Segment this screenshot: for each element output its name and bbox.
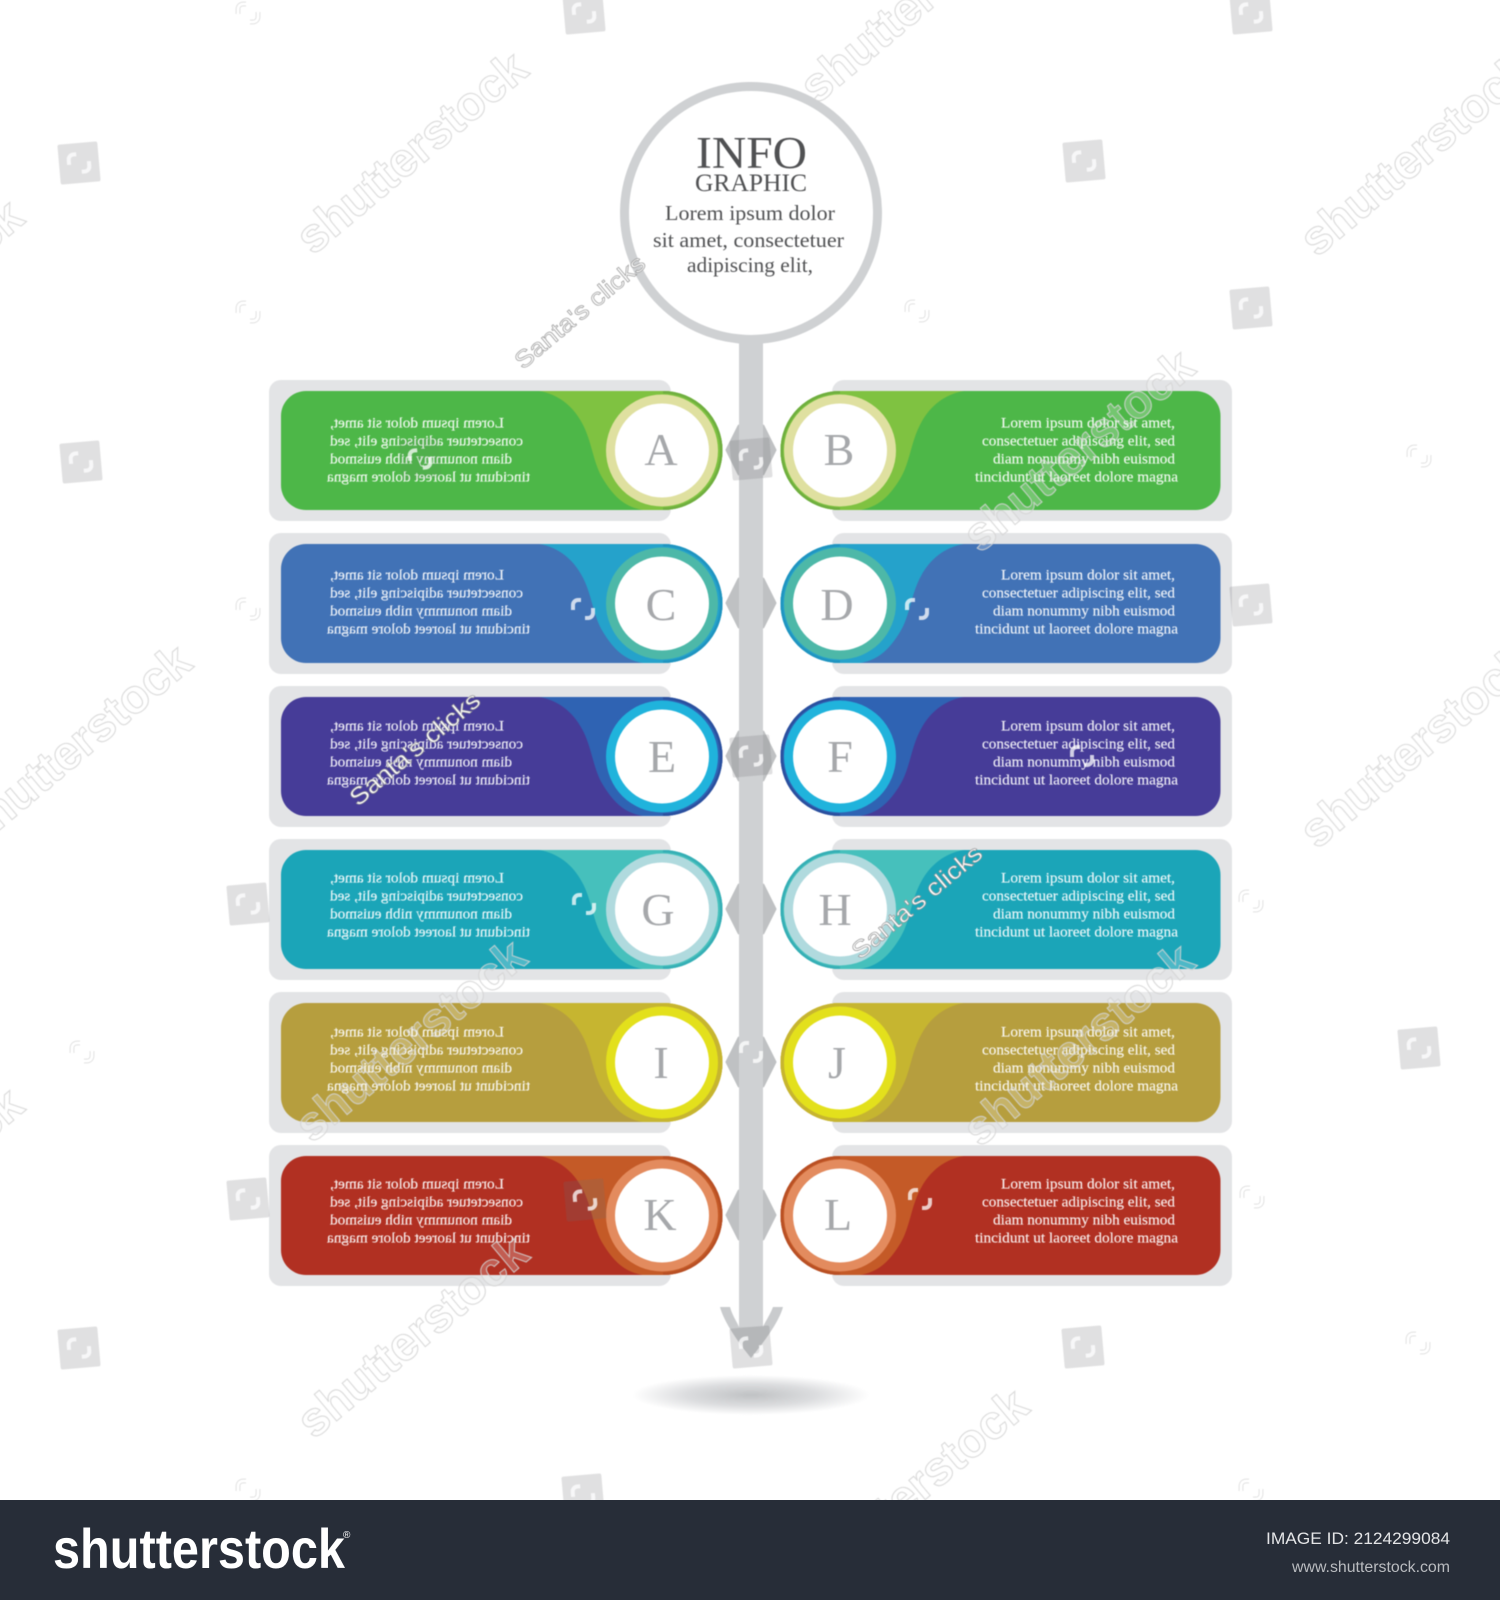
letter H: H — [818, 884, 852, 935]
watermark text: shutterstock repeats: shutterstock — [285, 929, 537, 1152]
watermark text: shutterstock repeats: shutterstock — [953, 933, 1205, 1156]
panel A — [269, 380, 722, 521]
central spine — [739, 340, 763, 1330]
panel D: tincidunt ut laoreet dolore magna — [975, 622, 1178, 638]
panel H: Lorem ipsum dolor sit amet, — [1001, 870, 1175, 886]
watermark text: shutterstock repeats: shutterstock — [953, 339, 1205, 562]
letter A: A — [644, 424, 678, 475]
panel H: consectetuer adipiscing elit, sed — [982, 888, 1175, 904]
panel B: diam nonummy nibh euismod — [993, 452, 1176, 468]
panel C — [269, 533, 722, 674]
subtitle: GRAPHIC: GRAPHIC — [695, 170, 807, 197]
panel A: Lorem ipsum dolor sit amet, — [330, 416, 504, 432]
watermark text: Santa's clicks: Santa's clicks — [509, 250, 651, 375]
panel C: tincidunt ut laoreet dolore magna — [327, 622, 530, 638]
panel G: Lorem ipsum dolor sit amet, — [330, 870, 504, 886]
panel A: tincidunt ut laoreet dolore magna — [327, 470, 530, 486]
panel J: consectetuer adipiscing elit, sed — [982, 1042, 1175, 1058]
panel K: Lorem ipsum dolor sit amet, — [330, 1176, 504, 1192]
arrow ground shadow — [632, 1375, 870, 1415]
letter D: D — [820, 579, 854, 630]
footer bar — [0, 1500, 1500, 1600]
panel F: consectetuer adipiscing elit, sed — [982, 736, 1175, 752]
panel G: consectetuer adipiscing elit, sed — [330, 888, 523, 904]
title circle — [624, 86, 878, 340]
title description: sit amet, consectetuer — [653, 228, 844, 252]
panel E: tincidunt ut laoreet dolore magna — [327, 772, 530, 788]
panel F: tincidunt ut laoreet dolore magna — [975, 772, 1178, 788]
image id: IMAGE ID: 2124299084 — [1266, 1529, 1450, 1548]
watermark text: shutterstock repeats: shutterstock — [287, 1225, 539, 1448]
registered mark: ® — [343, 1530, 351, 1541]
panel I — [269, 992, 722, 1133]
panel D: diam nonummy nibh euismod — [993, 604, 1176, 620]
panel K: tincidunt ut laoreet dolore magna — [327, 1230, 530, 1246]
panel E: diam nonummy nibh euismod — [329, 754, 512, 770]
letter I: I — [653, 1037, 669, 1088]
panel G — [269, 839, 722, 980]
panel F — [780, 686, 1232, 827]
panel K: diam nonummy nibh euismod — [329, 1212, 512, 1228]
panel I: Lorem ipsum dolor sit amet, — [330, 1024, 504, 1040]
footer logo: shutterstock — [53, 1517, 346, 1580]
panel L: tincidunt ut laoreet dolore magna — [975, 1230, 1178, 1246]
panel E: consectetuer adipiscing elit, sed — [330, 736, 523, 752]
title: INFO: INFO — [696, 128, 807, 178]
panel G: diam nonummy nibh euismod — [329, 906, 512, 922]
panel A: consectetuer adipiscing elit, sed — [330, 434, 523, 450]
connector hexagons on spine — [727, 426, 775, 1239]
panel D — [780, 533, 1232, 674]
title description — [653, 201, 844, 277]
panel D: Lorem ipsum dolor sit amet, — [1001, 568, 1175, 584]
panel L: consectetuer adipiscing elit, sed — [982, 1194, 1175, 1210]
letter L: L — [824, 1189, 852, 1240]
letter J: J — [828, 1037, 846, 1088]
watermark text: shutterstock repeats: shutterstock — [787, 1378, 1039, 1600]
watermark text: Santa's clicks: Santa's clicks — [846, 840, 988, 965]
panel C: Lorem ipsum dolor sit amet, — [330, 568, 504, 584]
panel I: diam nonummy nibh euismod — [329, 1060, 512, 1076]
letter G: G — [641, 884, 675, 935]
panel F: Lorem ipsum dolor sit amet, — [1001, 718, 1175, 734]
panel L: Lorem ipsum dolor sit amet, — [1001, 1176, 1175, 1192]
panel I: tincidunt ut laoreet dolore magna — [327, 1078, 530, 1094]
panel L — [780, 1145, 1232, 1286]
panel D: consectetuer adipiscing elit, sed — [982, 586, 1175, 602]
panel C: diam nonummy nibh euismod — [329, 604, 512, 620]
letter C: C — [646, 579, 676, 630]
panel C: consectetuer adipiscing elit, sed — [330, 586, 523, 602]
title description: Lorem ipsum dolor — [665, 201, 835, 225]
panel J: diam nonummy nibh euismod — [993, 1060, 1176, 1076]
panel A: diam nonummy nibh euismod — [329, 452, 512, 468]
letter K: K — [643, 1189, 677, 1240]
panel J — [780, 992, 1232, 1133]
panel B — [780, 380, 1232, 521]
panel J: Lorem ipsum dolor sit amet, — [1001, 1024, 1175, 1040]
panel L: diam nonummy nibh euismod — [993, 1212, 1176, 1228]
panel H: diam nonummy nibh euismod — [993, 906, 1176, 922]
title description: adipiscing elit, — [687, 253, 813, 277]
panel B: consectetuer adipiscing elit, sed — [982, 434, 1175, 450]
watermark text: Santa's clicks: Santa's clicks — [344, 687, 486, 812]
panel H — [780, 839, 1232, 980]
arrowhead — [720, 1307, 783, 1358]
letter B: B — [824, 424, 854, 475]
letter F: F — [827, 731, 853, 782]
panel B: Lorem ipsum dolor sit amet, — [1001, 416, 1175, 432]
website: www.shutterstock.com — [1291, 1559, 1450, 1576]
watermark text: shutterstock repeats: shutterstock — [286, 41, 538, 264]
panel G: tincidunt ut laoreet dolore magna — [327, 924, 530, 940]
watermark text: Santa's clicks — [344, 250, 988, 965]
panel E: Lorem ipsum dolor sit amet, — [330, 718, 504, 734]
panel H: tincidunt ut laoreet dolore magna — [975, 924, 1178, 940]
panel I: consectetuer adipiscing elit, sed — [330, 1042, 523, 1058]
panel J: tincidunt ut laoreet dolore magna — [975, 1078, 1178, 1094]
panel K: consectetuer adipiscing elit, sed — [330, 1194, 523, 1210]
panel K — [269, 1145, 722, 1286]
panel B: tincidunt ut laoreet dolore magna — [975, 470, 1178, 486]
panel E — [269, 686, 722, 827]
letter E: E — [648, 731, 676, 782]
panel F: diam nonummy nibh euismod — [993, 754, 1176, 770]
